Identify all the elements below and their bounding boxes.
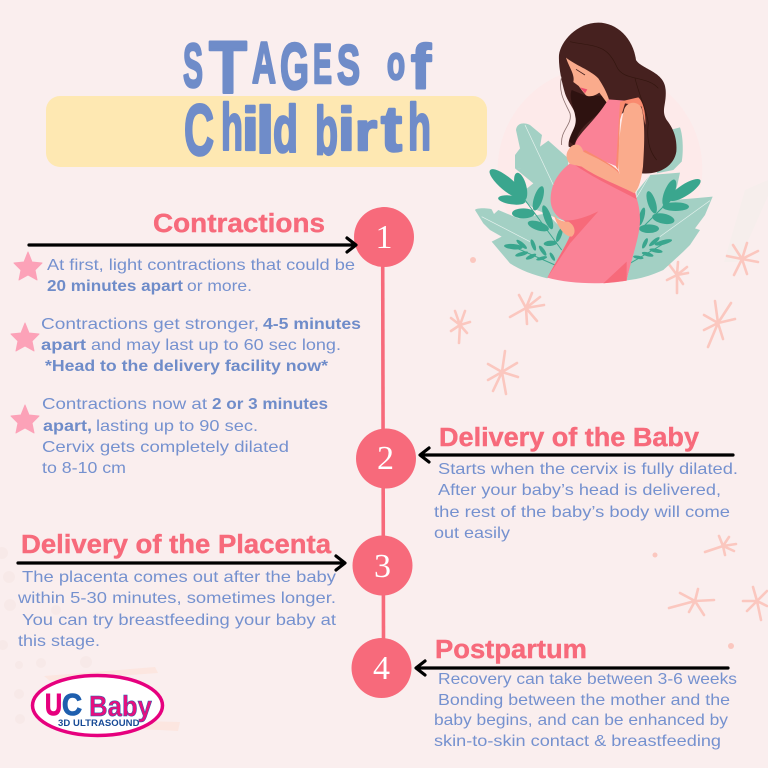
title line: Child birth: i [338, 96, 355, 163]
title line: Child birth: h [221, 90, 243, 164]
closed eye [576, 69, 585, 75]
star bullet 1 [14, 252, 42, 280]
decorative sparkle stars [451, 243, 767, 649]
step 3 marker: 3 [374, 548, 391, 585]
postpartum text: Recovery can take between 3-6 weeks [438, 671, 737, 688]
delivery of the placenta text [17, 569, 337, 650]
title line: STAGES of: S [183, 32, 203, 101]
delivery of the baby text: out easily [434, 525, 510, 542]
dress dark folds [547, 161, 637, 283]
title line: STAGES of: T [209, 26, 247, 109]
step 1 marker: 1 [376, 219, 392, 256]
contractions text 3: to 8-10 cm [42, 460, 126, 477]
contractions text 2 [41, 316, 361, 375]
star bullet 2 [11, 323, 39, 351]
title line: Child birth: t [381, 93, 402, 165]
large pale leaves [475, 123, 713, 280]
hair [559, 23, 676, 174]
logo: UC Baby 3D Ultrasound: Baby [89, 691, 152, 723]
title line: Child birth: b [315, 93, 338, 169]
contractions text 1: 20 minutes apart [47, 278, 184, 295]
title line: STAGES of: G [280, 29, 309, 103]
contractions text 2: *Head to the delivery facility now* [45, 358, 329, 375]
dark green branches [486, 165, 703, 265]
logo: UC Baby 3D Ultrasound [32, 676, 162, 736]
heading: Delivery of the Baby: Delivery of the Baby [439, 424, 700, 452]
arrow to step 3 [18, 556, 345, 570]
face and neck [566, 58, 609, 103]
title [46, 26, 487, 171]
step 1 marker [354, 207, 414, 267]
step 4 marker [352, 638, 412, 698]
title line: STAGES of: f [411, 33, 431, 102]
dress side trim [616, 97, 645, 170]
contractions text 1: or more. [187, 278, 252, 295]
delivery of the baby text [434, 461, 738, 542]
delivery of the baby text: Starts when the cervix is fully dilated. [438, 461, 738, 478]
contractions text 3: Contractions now at [42, 396, 208, 413]
title line: STAGES of: E [313, 32, 332, 95]
contractions text 3: lasting up to 90 sec. [96, 418, 258, 435]
contractions text 2: and may last up to 60 sec long. [91, 337, 341, 354]
title line: Child birth: r [355, 102, 377, 162]
arm trim [583, 150, 619, 174]
postpartum text [434, 671, 737, 750]
logo: UC Baby 3D Ultrasound: C [62, 687, 82, 722]
title line: Child birth: l [256, 93, 274, 167]
postpartum text: baby begins, and can be enhanced by [434, 712, 728, 729]
dress upper [575, 99, 625, 167]
contractions text 1 [47, 257, 355, 295]
lips [580, 87, 587, 93]
heading: Delivery of the Placenta: Delivery of the Placenta [21, 531, 332, 559]
title line: STAGES of [183, 26, 431, 109]
pale backdrop circle [498, 67, 702, 272]
title line: STAGES of: A [252, 31, 276, 96]
heading: Contractions: Contractions [153, 210, 325, 238]
postpartum text: skin-to-skin contact & breastfeeding [434, 733, 721, 750]
delivery of the placenta text: You can try breastfeeding your baby at [22, 612, 337, 629]
delivery of the placenta text: this stage. [18, 633, 100, 650]
title line: Child birth: C [184, 91, 214, 171]
shadow hair [569, 90, 607, 145]
contractions text 2: apart [41, 337, 87, 354]
leaf veins [482, 125, 710, 242]
delivery of the placenta text: The placenta comes out after the baby [22, 569, 336, 586]
title line: Child birth: h [408, 90, 431, 164]
arrow to step 1 [29, 238, 356, 252]
contractions text 3: apart, [43, 418, 92, 435]
arrow to step 4 [416, 661, 728, 675]
delivery of the placenta text: within 5-30 minutes, sometimes longer. [17, 590, 336, 607]
step 2 marker: 2 [377, 440, 394, 477]
delivery of the baby text: After your baby’s head is delivered, [438, 482, 721, 499]
contractions text 2: Contractions get stronger, [41, 316, 259, 333]
contractions text 1: At first, light contractions that could be [47, 257, 355, 274]
title highlight box [46, 96, 487, 167]
step 3 marker [352, 536, 412, 596]
contractions text 3: Cervix gets completely dilated [42, 439, 289, 456]
hair strands [561, 42, 658, 160]
star bullet 3 [11, 405, 39, 433]
arm and upper hand [567, 103, 644, 193]
heading: Postpartum: Postpartum [435, 636, 587, 664]
step 2 marker [356, 428, 416, 488]
delivery of the baby text: the rest of the baby’s body will come [434, 504, 730, 521]
illustration: pregnant woman with leaves [475, 23, 713, 283]
logo: UC Baby 3D Ultrasound: 3D ULTRASOUND [58, 718, 140, 729]
dress lower with belly [547, 163, 640, 283]
timeline line [381, 260, 385, 640]
lower hand [553, 213, 575, 237]
step 4 marker: 4 [373, 650, 390, 687]
logo: UC Baby 3D Ultrasound: U [45, 687, 62, 722]
title line: STAGES of: o [387, 36, 405, 89]
title line: Child birth [184, 90, 431, 171]
arrow to step 2 [420, 448, 733, 462]
contractions text 3 [42, 396, 328, 477]
contractions text 2: 4-5 minutes [263, 316, 361, 333]
contractions text 3: 2 or 3 minutes [212, 396, 328, 413]
title line: STAGES of: S [337, 33, 360, 96]
postpartum text: Bonding between the mother and the [438, 692, 730, 709]
title line: Child birth: d [273, 92, 298, 166]
title line: Child birth: i [242, 96, 259, 163]
faint background decoration [0, 180, 768, 731]
